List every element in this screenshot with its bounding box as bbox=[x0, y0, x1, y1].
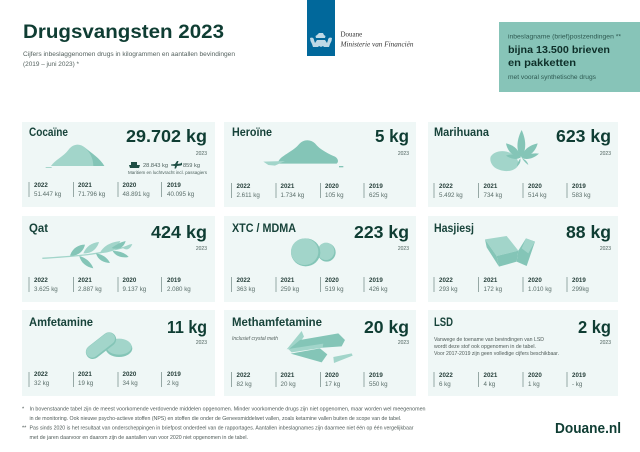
heading: Cocaïne: Cocaïne bbox=[29, 127, 68, 139]
history 2022-2019: 2022 bbox=[34, 182, 48, 189]
history 2022-2019: 105 kg bbox=[325, 192, 344, 199]
history 2022-2019: 9.137 kg bbox=[122, 286, 147, 293]
amount: 11 kg: 11 kg bbox=[167, 317, 207, 337]
history 2022-2019: 82 kg bbox=[236, 381, 252, 388]
history 2022-2019: 2022 bbox=[439, 277, 453, 284]
history 2022-2019 bbox=[232, 277, 388, 293]
history 2022-2019: 2019 bbox=[167, 182, 181, 189]
footnotes: met de jaren daarvoor en daarom zijn de aantallen van voor 2020 niet opgenomen in de tabel. bbox=[30, 435, 248, 441]
history 2022-2019: 4 kg bbox=[484, 381, 496, 388]
note: LSD explanation: Vanwege de toename van bevindingen van LSD bbox=[434, 337, 544, 343]
year label: 2023 bbox=[600, 340, 611, 346]
subtitle: Cijfers inbeslaggenomen drugs in kilogrammen en aantallen bevindingen bbox=[23, 51, 235, 58]
history 2022-2019: 71.796 kg bbox=[78, 191, 106, 198]
history 2022-2019: 17 kg bbox=[325, 381, 341, 388]
history 2022-2019 bbox=[232, 372, 388, 388]
history 2022-2019: 2021 bbox=[78, 277, 92, 284]
logo text: Ministerie van Financiën bbox=[339, 42, 414, 48]
footnotes: * bbox=[22, 406, 25, 412]
history 2022-2019: 519 kg bbox=[325, 286, 344, 293]
history 2022-2019: 2020 bbox=[528, 277, 542, 284]
panel: Methamfetamine bbox=[224, 310, 416, 396]
heading: Qat: Qat bbox=[29, 223, 48, 235]
amount: 424 kg: 424 kg bbox=[151, 222, 207, 242]
history 2022-2019: 2020 bbox=[122, 182, 137, 189]
history 2022-2019: 2019 bbox=[167, 277, 181, 284]
history 2022-2019: 2021 bbox=[280, 372, 295, 379]
note: LSD explanation bbox=[433, 337, 559, 357]
history 2022-2019: 2020 bbox=[325, 183, 339, 190]
history 2022-2019: 2019 bbox=[369, 277, 383, 284]
logo: Rijksoverheid ribbon with emblem bbox=[307, 0, 335, 56]
history 2022-2019: 40.095 kg bbox=[167, 191, 195, 198]
history 2022-2019: 2019 bbox=[572, 372, 586, 379]
title: Drugsvangsten 2023 bbox=[23, 22, 224, 43]
history 2022-2019: 2019 bbox=[572, 183, 586, 190]
history 2022-2019: 32 kg bbox=[34, 380, 50, 387]
transport split: sea and air freight bbox=[128, 161, 207, 175]
history 2022-2019: 2022 bbox=[34, 277, 48, 284]
heading: Amfetamine: Amfetamine bbox=[29, 317, 93, 329]
icon: cocaine powder mound bbox=[46, 145, 104, 168]
callout: letters and parcels: inbeslagname (brief)postzendingen ** bbox=[508, 34, 621, 40]
history 2022-2019: 19 kg bbox=[78, 380, 94, 387]
heading: Marihuana: Marihuana bbox=[434, 127, 490, 139]
history 2022-2019: 1.734 kg bbox=[280, 192, 305, 199]
history 2022-2019 bbox=[434, 277, 589, 293]
amount: 623 kg: 623 kg bbox=[556, 126, 611, 146]
transport split: sea and air freight: 28.843 kg bbox=[143, 163, 168, 169]
panel: LSD bbox=[428, 310, 618, 396]
year label: 2023 bbox=[196, 340, 207, 346]
note: crystal meth: Inclusief crystal meth bbox=[232, 336, 278, 342]
history 2022-2019: 625 kg bbox=[369, 192, 388, 199]
history 2022-2019: 2.887 kg bbox=[78, 286, 102, 293]
year label: 2023 bbox=[600, 151, 611, 157]
panel: XTC / MDMA bbox=[224, 216, 416, 302]
year label: 2023 bbox=[398, 340, 409, 346]
history 2022-2019: 51.447 kg bbox=[34, 191, 62, 198]
callout: letters and parcels bbox=[499, 22, 640, 92]
history 2022-2019: 2020 bbox=[122, 277, 137, 284]
note: LSD explanation: wordt deze stof ook opgenomen in de tabel. bbox=[433, 344, 536, 350]
callout: letters and parcels: en pakketten bbox=[508, 57, 576, 69]
history 2022-2019: 2021 bbox=[78, 371, 92, 378]
history 2022-2019: 3.625 kg bbox=[34, 286, 58, 293]
history 2022-2019 bbox=[29, 277, 191, 293]
subtitle: (2019 – juni 2023) * bbox=[23, 61, 80, 68]
history 2022-2019: 2019 bbox=[369, 372, 383, 379]
history 2022-2019 bbox=[29, 182, 195, 198]
history 2022-2019: 550 kg bbox=[369, 381, 388, 388]
amount: 2 kg: 2 kg bbox=[578, 317, 611, 337]
footnotes: in de monitoring. Ook nieuwe psycho-actieve stoffen (NPS) en stoffen die onder de Geneesmiddelwet vallen, zoals ketamine vallen buiten de scope van de tabel. bbox=[30, 416, 402, 422]
history 2022-2019: 259 kg bbox=[280, 286, 300, 293]
history 2022-2019: 172 kg bbox=[484, 286, 503, 293]
amount: 5 kg: 5 kg bbox=[375, 126, 409, 146]
history 2022-2019: 2022 bbox=[34, 371, 48, 378]
heading: XTC / MDMA: XTC / MDMA bbox=[232, 223, 296, 235]
history 2022-2019: 1.010 kg bbox=[528, 286, 552, 293]
history 2022-2019: 34 kg bbox=[122, 380, 138, 387]
history 2022-2019: 583 kg bbox=[572, 192, 591, 199]
history 2022-2019: 2022 bbox=[439, 183, 453, 190]
icon: ecstasy pills bbox=[291, 238, 336, 266]
history 2022-2019: 2020 bbox=[528, 183, 542, 190]
history 2022-2019: 2022 bbox=[439, 372, 453, 379]
panel: Qat bbox=[22, 216, 215, 302]
icon: cannabis leaf and bud bbox=[490, 130, 539, 171]
footnotes bbox=[22, 406, 426, 441]
icon: qat branch bbox=[42, 241, 132, 268]
history 2022-2019: 2020 bbox=[122, 371, 137, 378]
heading: Hasjiesj: Hasjiesj bbox=[434, 223, 474, 235]
icon: hashish blocks bbox=[485, 236, 535, 267]
history 2022-2019: 2021 bbox=[484, 183, 498, 190]
history 2022-2019: 514 kg bbox=[528, 192, 547, 199]
heading: LSD: LSD bbox=[434, 317, 453, 329]
callout: letters and parcels: met vooral synthetische drugs bbox=[508, 74, 597, 81]
history 2022-2019: 2 kg bbox=[167, 380, 179, 387]
history 2022-2019: 2020 bbox=[325, 372, 339, 379]
footnotes: Pas sinds 2020 is het resultaat van onderscheppingen in briefpost onderdeel van de rapportages. Aantallen inbeslagnames zijn daarmee niet één op één vergelijkbaar bbox=[30, 426, 414, 432]
history 2022-2019: 2019 bbox=[572, 277, 586, 284]
history 2022-2019: 6 kg bbox=[439, 381, 451, 388]
icon: methamphetamine crystals bbox=[287, 331, 353, 363]
panel: Amfetamine bbox=[22, 310, 215, 396]
amount: 29.702 kg: 29.702 kg bbox=[126, 126, 207, 146]
amount: 223 kg: 223 kg bbox=[354, 222, 409, 242]
callout: letters and parcels: bijna 13.500 brieven bbox=[508, 44, 610, 56]
history 2022-2019: 5.492 kg bbox=[439, 192, 463, 199]
history 2022-2019 bbox=[434, 183, 591, 199]
history 2022-2019 bbox=[29, 371, 181, 387]
history 2022-2019: - kg bbox=[572, 381, 583, 388]
footnotes: ** bbox=[22, 426, 27, 432]
history 2022-2019: 363 kg bbox=[236, 286, 256, 293]
website: Douane.nl: Douane.nl bbox=[555, 420, 621, 437]
history 2022-2019: 20 kg bbox=[280, 381, 296, 388]
icon: heroin powder mound bbox=[263, 140, 343, 167]
history 2022-2019: 299kg bbox=[572, 286, 589, 293]
history 2022-2019: 2020 bbox=[528, 372, 542, 379]
history 2022-2019: 2019 bbox=[167, 371, 181, 378]
history 2022-2019: 2021 bbox=[484, 277, 498, 284]
icon: amphetamine tablets bbox=[83, 329, 132, 362]
year label: 2023 bbox=[398, 151, 409, 157]
history 2022-2019: 1 kg bbox=[528, 381, 540, 388]
amount: 20 kg: 20 kg bbox=[364, 317, 409, 337]
history 2022-2019: 2022 bbox=[236, 277, 251, 284]
footnotes: In bovenstaande tabel zijn de meest voorkomende verdovende middelen opgenomen. Minder voorkomende drugs zijn niet opgenomen, maar worden wel meegenomen bbox=[30, 406, 426, 412]
history 2022-2019 bbox=[232, 183, 388, 199]
history 2022-2019: 2019 bbox=[369, 183, 383, 190]
history 2022-2019: 2021 bbox=[280, 277, 295, 284]
history 2022-2019: 2.080 kg bbox=[167, 286, 191, 293]
logo text: Douane bbox=[340, 30, 362, 38]
year label: 2023 bbox=[600, 246, 611, 252]
heading: Heroïne: Heroïne bbox=[232, 127, 272, 139]
heading: Methamfetamine: Methamfetamine bbox=[232, 317, 322, 329]
logo text bbox=[339, 30, 414, 48]
panel: Hasjiesj bbox=[428, 216, 618, 302]
history 2022-2019: 2021 bbox=[280, 183, 295, 190]
panel: Cocaïne bbox=[22, 122, 215, 207]
history 2022-2019: 2022 bbox=[236, 372, 251, 379]
history 2022-2019 bbox=[434, 372, 586, 388]
history 2022-2019: 734 kg bbox=[484, 192, 503, 199]
year label: 2023 bbox=[196, 151, 207, 157]
subtitle bbox=[23, 51, 235, 68]
amount: 88 kg: 88 kg bbox=[566, 222, 611, 242]
history 2022-2019: 293 kg bbox=[439, 286, 458, 293]
history 2022-2019: 2.611 kg bbox=[236, 192, 260, 199]
transport split: sea and air freight: Maritiem en luchtvracht incl. passagiers bbox=[128, 170, 207, 175]
panel: Heroïne bbox=[224, 122, 416, 207]
history 2022-2019: 2022 bbox=[236, 183, 251, 190]
history 2022-2019: 426 kg bbox=[369, 286, 388, 293]
year label: 2023 bbox=[398, 246, 409, 252]
note: LSD explanation: Voor 2017-2019 zijn geen volledige cijfers beschikbaar. bbox=[434, 351, 559, 357]
transport split: sea and air freight: 859 kg bbox=[183, 163, 200, 169]
history 2022-2019: 2021 bbox=[484, 372, 498, 379]
year label: 2023 bbox=[196, 246, 207, 252]
history 2022-2019: 48.891 kg bbox=[122, 191, 150, 198]
history 2022-2019: 2021 bbox=[78, 182, 92, 189]
history 2022-2019: 2020 bbox=[325, 277, 339, 284]
panel: Marihuana bbox=[428, 122, 618, 207]
